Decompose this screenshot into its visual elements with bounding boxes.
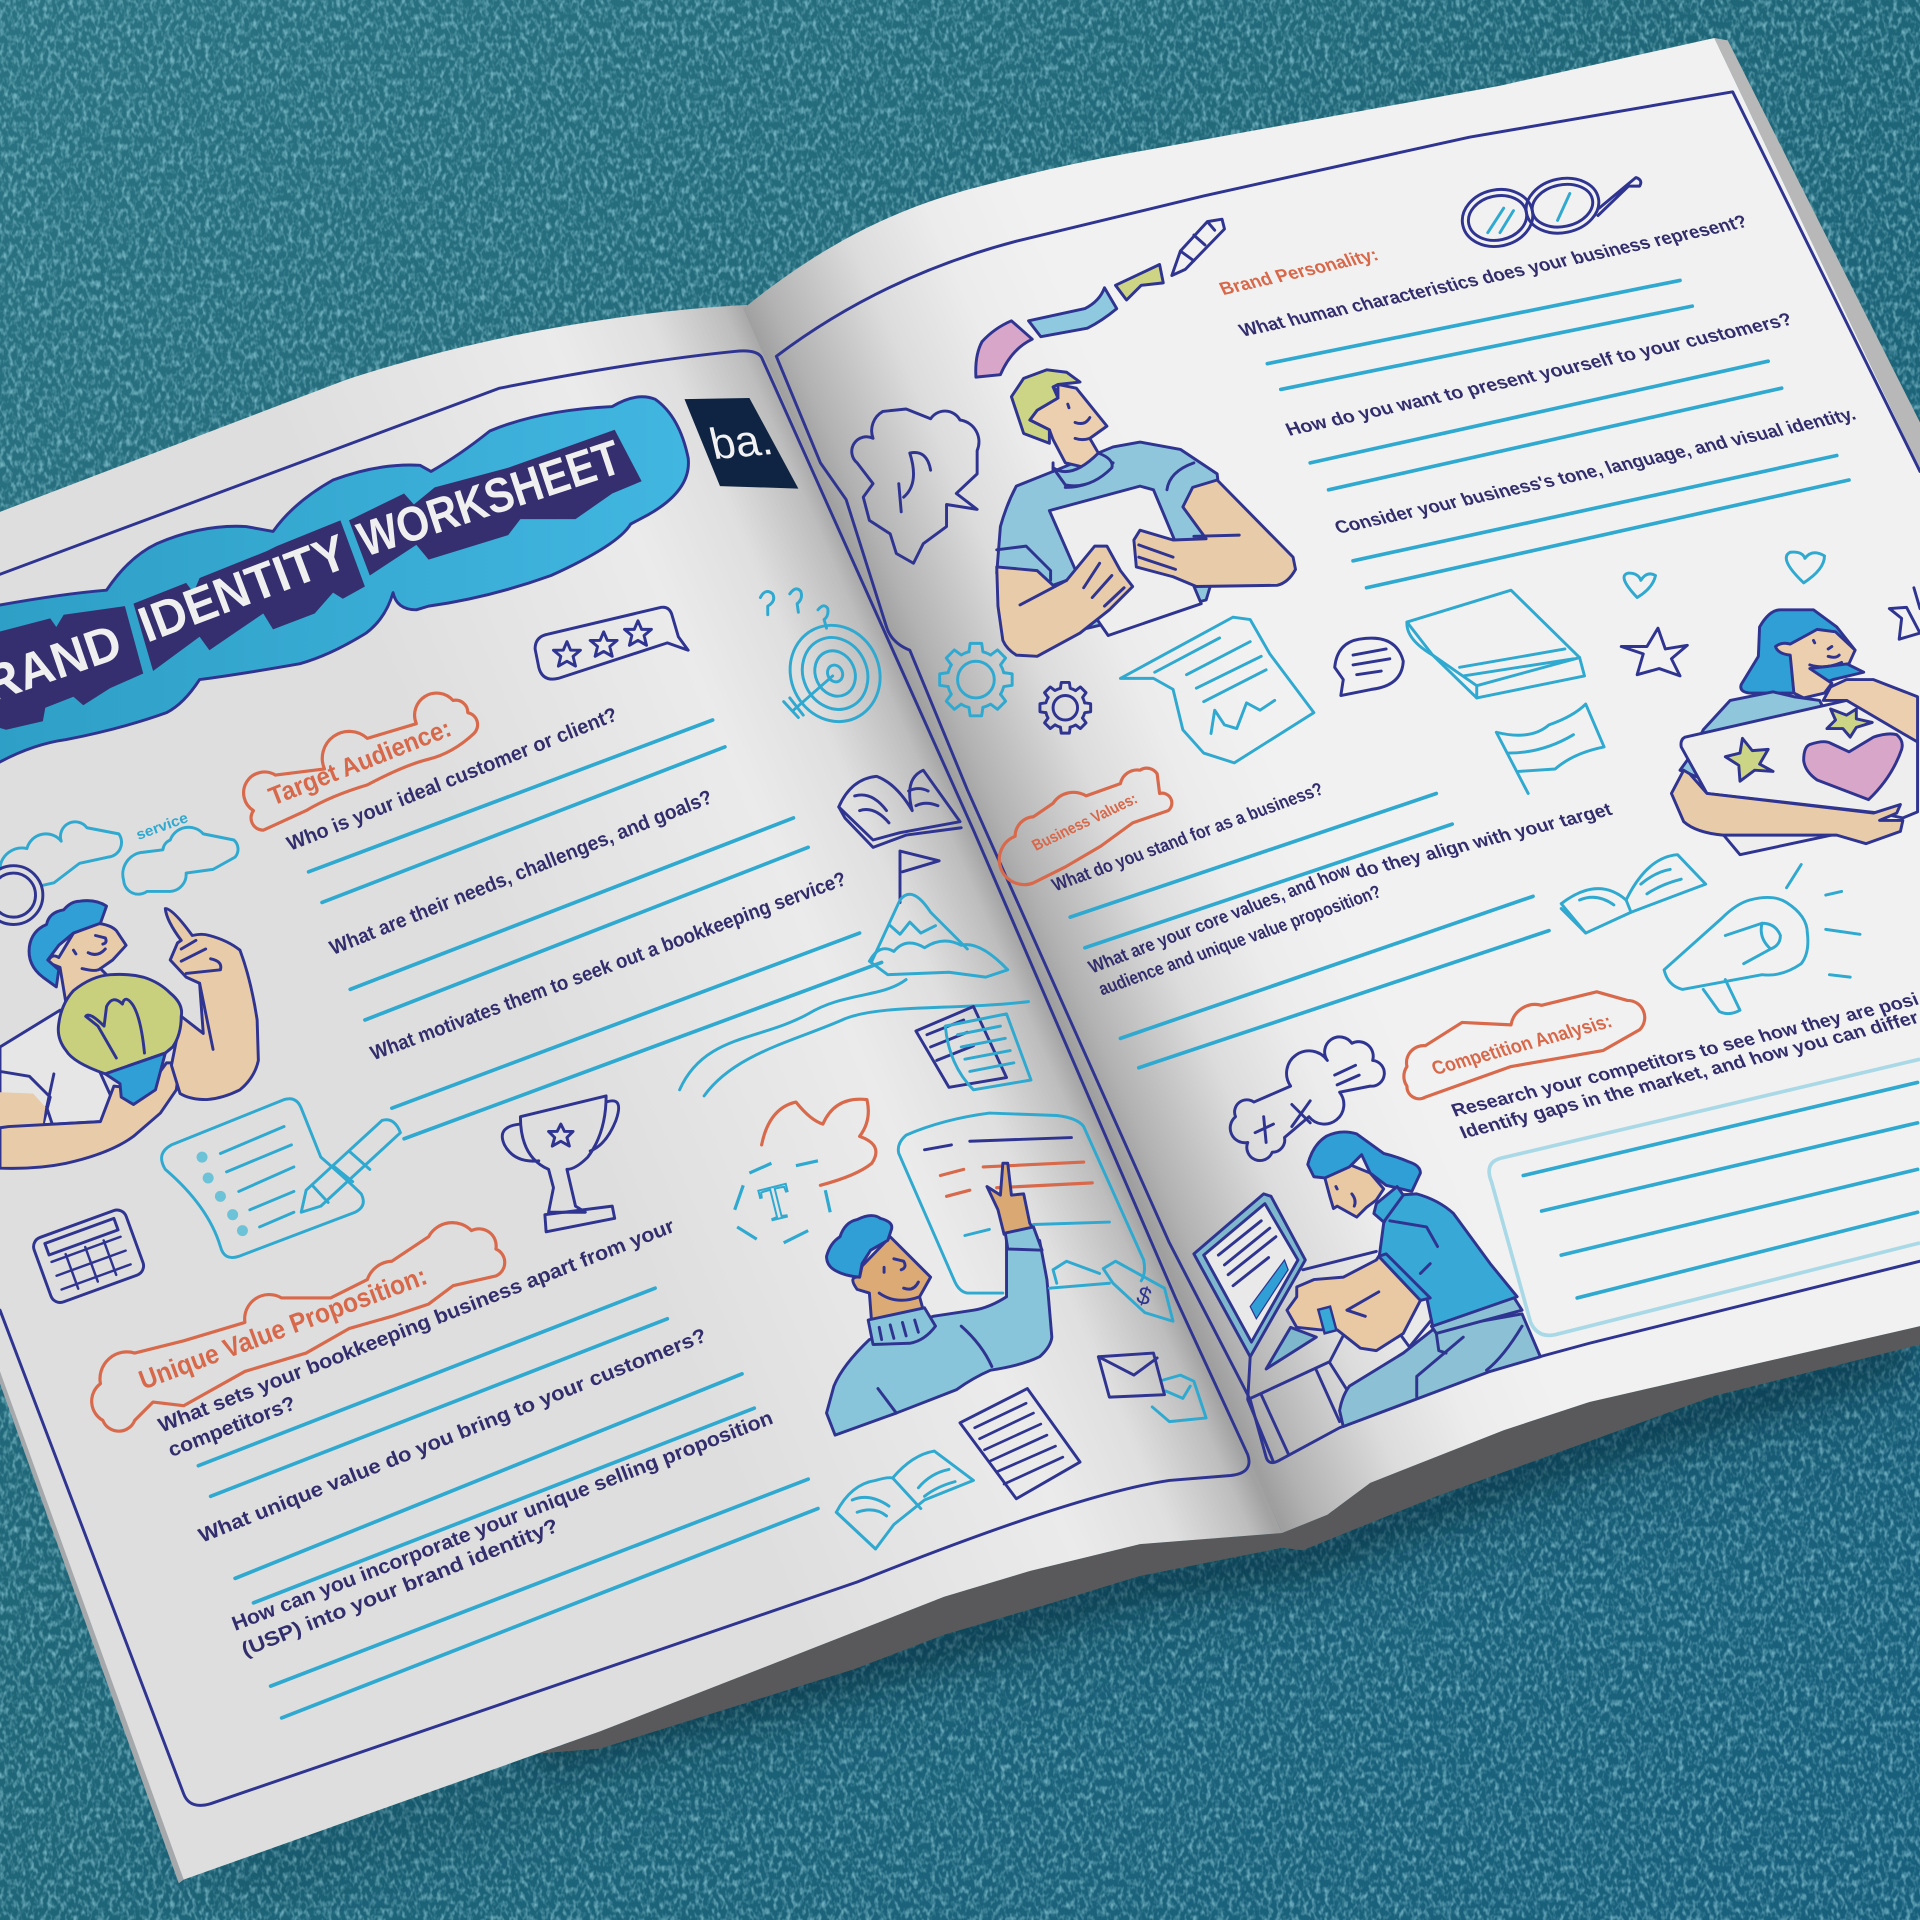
pointing arm xyxy=(165,909,258,1100)
questions: unique value proposition xyxy=(155,1215,818,1718)
left sleeve xyxy=(997,546,1051,580)
icon: lined document xyxy=(960,1389,1080,1499)
illustration: whiteboard xyxy=(898,1113,1144,1293)
heading: target audience: Target Audience: xyxy=(265,714,455,811)
icon: thought cloud xyxy=(852,409,979,563)
icon: math cloud xyxy=(1230,1037,1384,1161)
icon: price tag xyxy=(1049,1261,1173,1321)
desk xyxy=(1248,1251,1376,1462)
icon: trophy xyxy=(502,1096,619,1232)
left page border xyxy=(0,351,1249,1805)
right page outer edge xyxy=(1714,38,1920,469)
face xyxy=(1030,384,1107,468)
heading: brand personality: Brand Personality: xyxy=(1216,244,1381,299)
sleeve xyxy=(1379,1254,1430,1300)
icon: closed book xyxy=(1407,590,1584,698)
questions: unique value proposition: What sets your bookkeeping business apart from your xyxy=(155,1215,678,1437)
title text: WORKSHEET xyxy=(351,431,628,568)
turtleneck xyxy=(1374,1187,1403,1222)
icon: documents stack xyxy=(916,1007,1031,1090)
left page xyxy=(0,305,1282,1880)
illustration: woman holding box xyxy=(1671,610,1918,855)
questions: business values xyxy=(1048,778,1615,1068)
page stack edge xyxy=(539,1326,1920,1753)
questions: unique value proposition: (USP) into your brand identity? xyxy=(239,1515,562,1661)
heading: competition analysis: Competition Analysis: xyxy=(1428,1011,1615,1080)
left page outer edge xyxy=(0,1335,184,1883)
questions: unique value proposition: competitors? xyxy=(165,1393,299,1462)
illustration: woman at computer xyxy=(1194,1132,1540,1462)
book shadow xyxy=(208,1351,1910,1861)
title text xyxy=(0,431,628,724)
sleeve arm xyxy=(0,1092,45,1127)
illustration: mountain with flag xyxy=(680,851,1029,1096)
illustration: clouds and service label xyxy=(0,810,238,924)
right arm xyxy=(1134,480,1296,587)
pants xyxy=(1340,1314,1540,1427)
shirt xyxy=(0,1010,116,1127)
neck and head xyxy=(48,923,126,1004)
white shirt xyxy=(1400,1289,1436,1347)
top arm xyxy=(1823,680,1918,747)
sweater xyxy=(1379,1194,1517,1326)
questions: target audience: What are their needs, challenges, and goals? xyxy=(327,786,716,960)
questions: business values: What are your core values, and how xyxy=(1085,859,1354,977)
hair xyxy=(827,1216,892,1277)
heading: unique value proposition: Unique Value Proposition: xyxy=(135,1261,431,1395)
icon: open book bottom xyxy=(836,1451,973,1549)
hair xyxy=(1741,610,1864,693)
cuff xyxy=(1005,1227,1042,1250)
title banner xyxy=(0,397,688,765)
icons: gears xyxy=(940,643,1091,733)
logo: ba. xyxy=(684,398,798,489)
face xyxy=(1325,1164,1384,1217)
icon: signed contract xyxy=(1120,617,1314,763)
illustration: ribbons and pencil xyxy=(976,219,1224,377)
questions: target audience: Who is your ideal customer or client? xyxy=(284,704,621,856)
questions: business values: What do you stand for as a business? xyxy=(1048,778,1326,895)
sweater xyxy=(827,1233,1052,1435)
right page border xyxy=(776,92,1920,1463)
face xyxy=(1776,629,1855,698)
body xyxy=(1680,692,1837,784)
illustration: clouds and service label: service xyxy=(134,810,190,844)
belt xyxy=(1431,1297,1522,1333)
under box xyxy=(1722,833,1843,855)
monitor xyxy=(1194,1194,1305,1357)
icon: orange swoosh and T box xyxy=(735,1099,876,1243)
hair xyxy=(29,901,107,987)
questions: target audience xyxy=(284,704,882,1139)
collar xyxy=(868,1308,936,1344)
questions: business values: do they align with your target xyxy=(1351,799,1615,882)
questions: brand personality xyxy=(1235,211,1859,588)
icon: checklist and pencil xyxy=(162,1099,400,1258)
icons: hearts and stars xyxy=(1621,552,1920,676)
questions: business values: audience and unique value proposition? xyxy=(1095,881,1384,999)
label patches xyxy=(0,430,642,730)
right page xyxy=(743,38,1920,1533)
heading: business values xyxy=(999,768,1172,885)
watch xyxy=(1318,1307,1336,1333)
illustration: man with light bulb xyxy=(0,901,258,1168)
box xyxy=(1681,700,1918,818)
questions: target audience: What motivates them to seek out a bookkeeping service? xyxy=(368,868,849,1065)
icon: flag xyxy=(1496,704,1604,793)
torso xyxy=(997,442,1224,631)
heart xyxy=(1804,734,1902,800)
questions: brand personality: Consider your business's tone, language, and visual identity. xyxy=(1331,403,1859,538)
keyboard xyxy=(1266,1327,1316,1369)
icon: rating bubble xyxy=(535,607,688,679)
logo: ba.: ba. xyxy=(705,416,777,469)
banner cloud xyxy=(0,397,688,765)
questions: brand personality: How do you want to present yourself to your customers? xyxy=(1282,309,1796,440)
questions: unique value proposition: How can you incorporate your unique selling proposition xyxy=(229,1407,776,1636)
heading: competition analysis xyxy=(1404,992,1645,1099)
questions: brand personality: What human characteristics does your business represent? xyxy=(1235,211,1751,340)
questions: unique value proposition: What unique value do you bring to your customers? xyxy=(196,1325,710,1547)
hair xyxy=(1308,1132,1420,1191)
answer box xyxy=(1489,1059,1920,1335)
illustration: man pointing xyxy=(827,1163,1052,1435)
collar xyxy=(1053,453,1112,486)
icon: target with arrow xyxy=(760,589,896,736)
left arm xyxy=(997,546,1133,656)
paper xyxy=(1049,486,1201,636)
illustration: man holding paper xyxy=(997,370,1296,656)
heading: unique value proposition xyxy=(92,1223,505,1431)
icon: envelopes xyxy=(1098,1353,1206,1422)
icon: price tag: $ xyxy=(1133,1282,1155,1312)
question: competition analysis: Research your competitors to see how they are posi xyxy=(1448,988,1920,1120)
gear cyan xyxy=(940,643,1012,716)
icon: chat bubble xyxy=(1335,638,1403,696)
icon: open book right xyxy=(1561,855,1706,933)
icon: megaphone xyxy=(1664,864,1860,1014)
question: competition analysis: Identify gaps in the market, and how you can differ xyxy=(1456,1007,1920,1142)
hair xyxy=(1011,370,1080,443)
bulb xyxy=(58,974,182,1074)
title text: IDENTITY xyxy=(131,524,355,653)
arm xyxy=(1287,1256,1420,1351)
icon: calculator xyxy=(31,1207,146,1305)
box stars xyxy=(1725,709,1872,781)
lower arm xyxy=(0,1063,180,1168)
heading: business values: Business Values: xyxy=(1029,791,1141,854)
heading: target audience xyxy=(244,693,478,830)
icon: glasses xyxy=(1457,172,1641,253)
raised hand xyxy=(987,1163,1033,1234)
bulb base xyxy=(105,1053,165,1104)
lower arm xyxy=(1671,770,1903,844)
gear navy xyxy=(1040,682,1091,733)
icon: orange swoosh and T box: T xyxy=(755,1172,797,1233)
face xyxy=(853,1237,931,1325)
icon: open book top xyxy=(839,770,961,847)
